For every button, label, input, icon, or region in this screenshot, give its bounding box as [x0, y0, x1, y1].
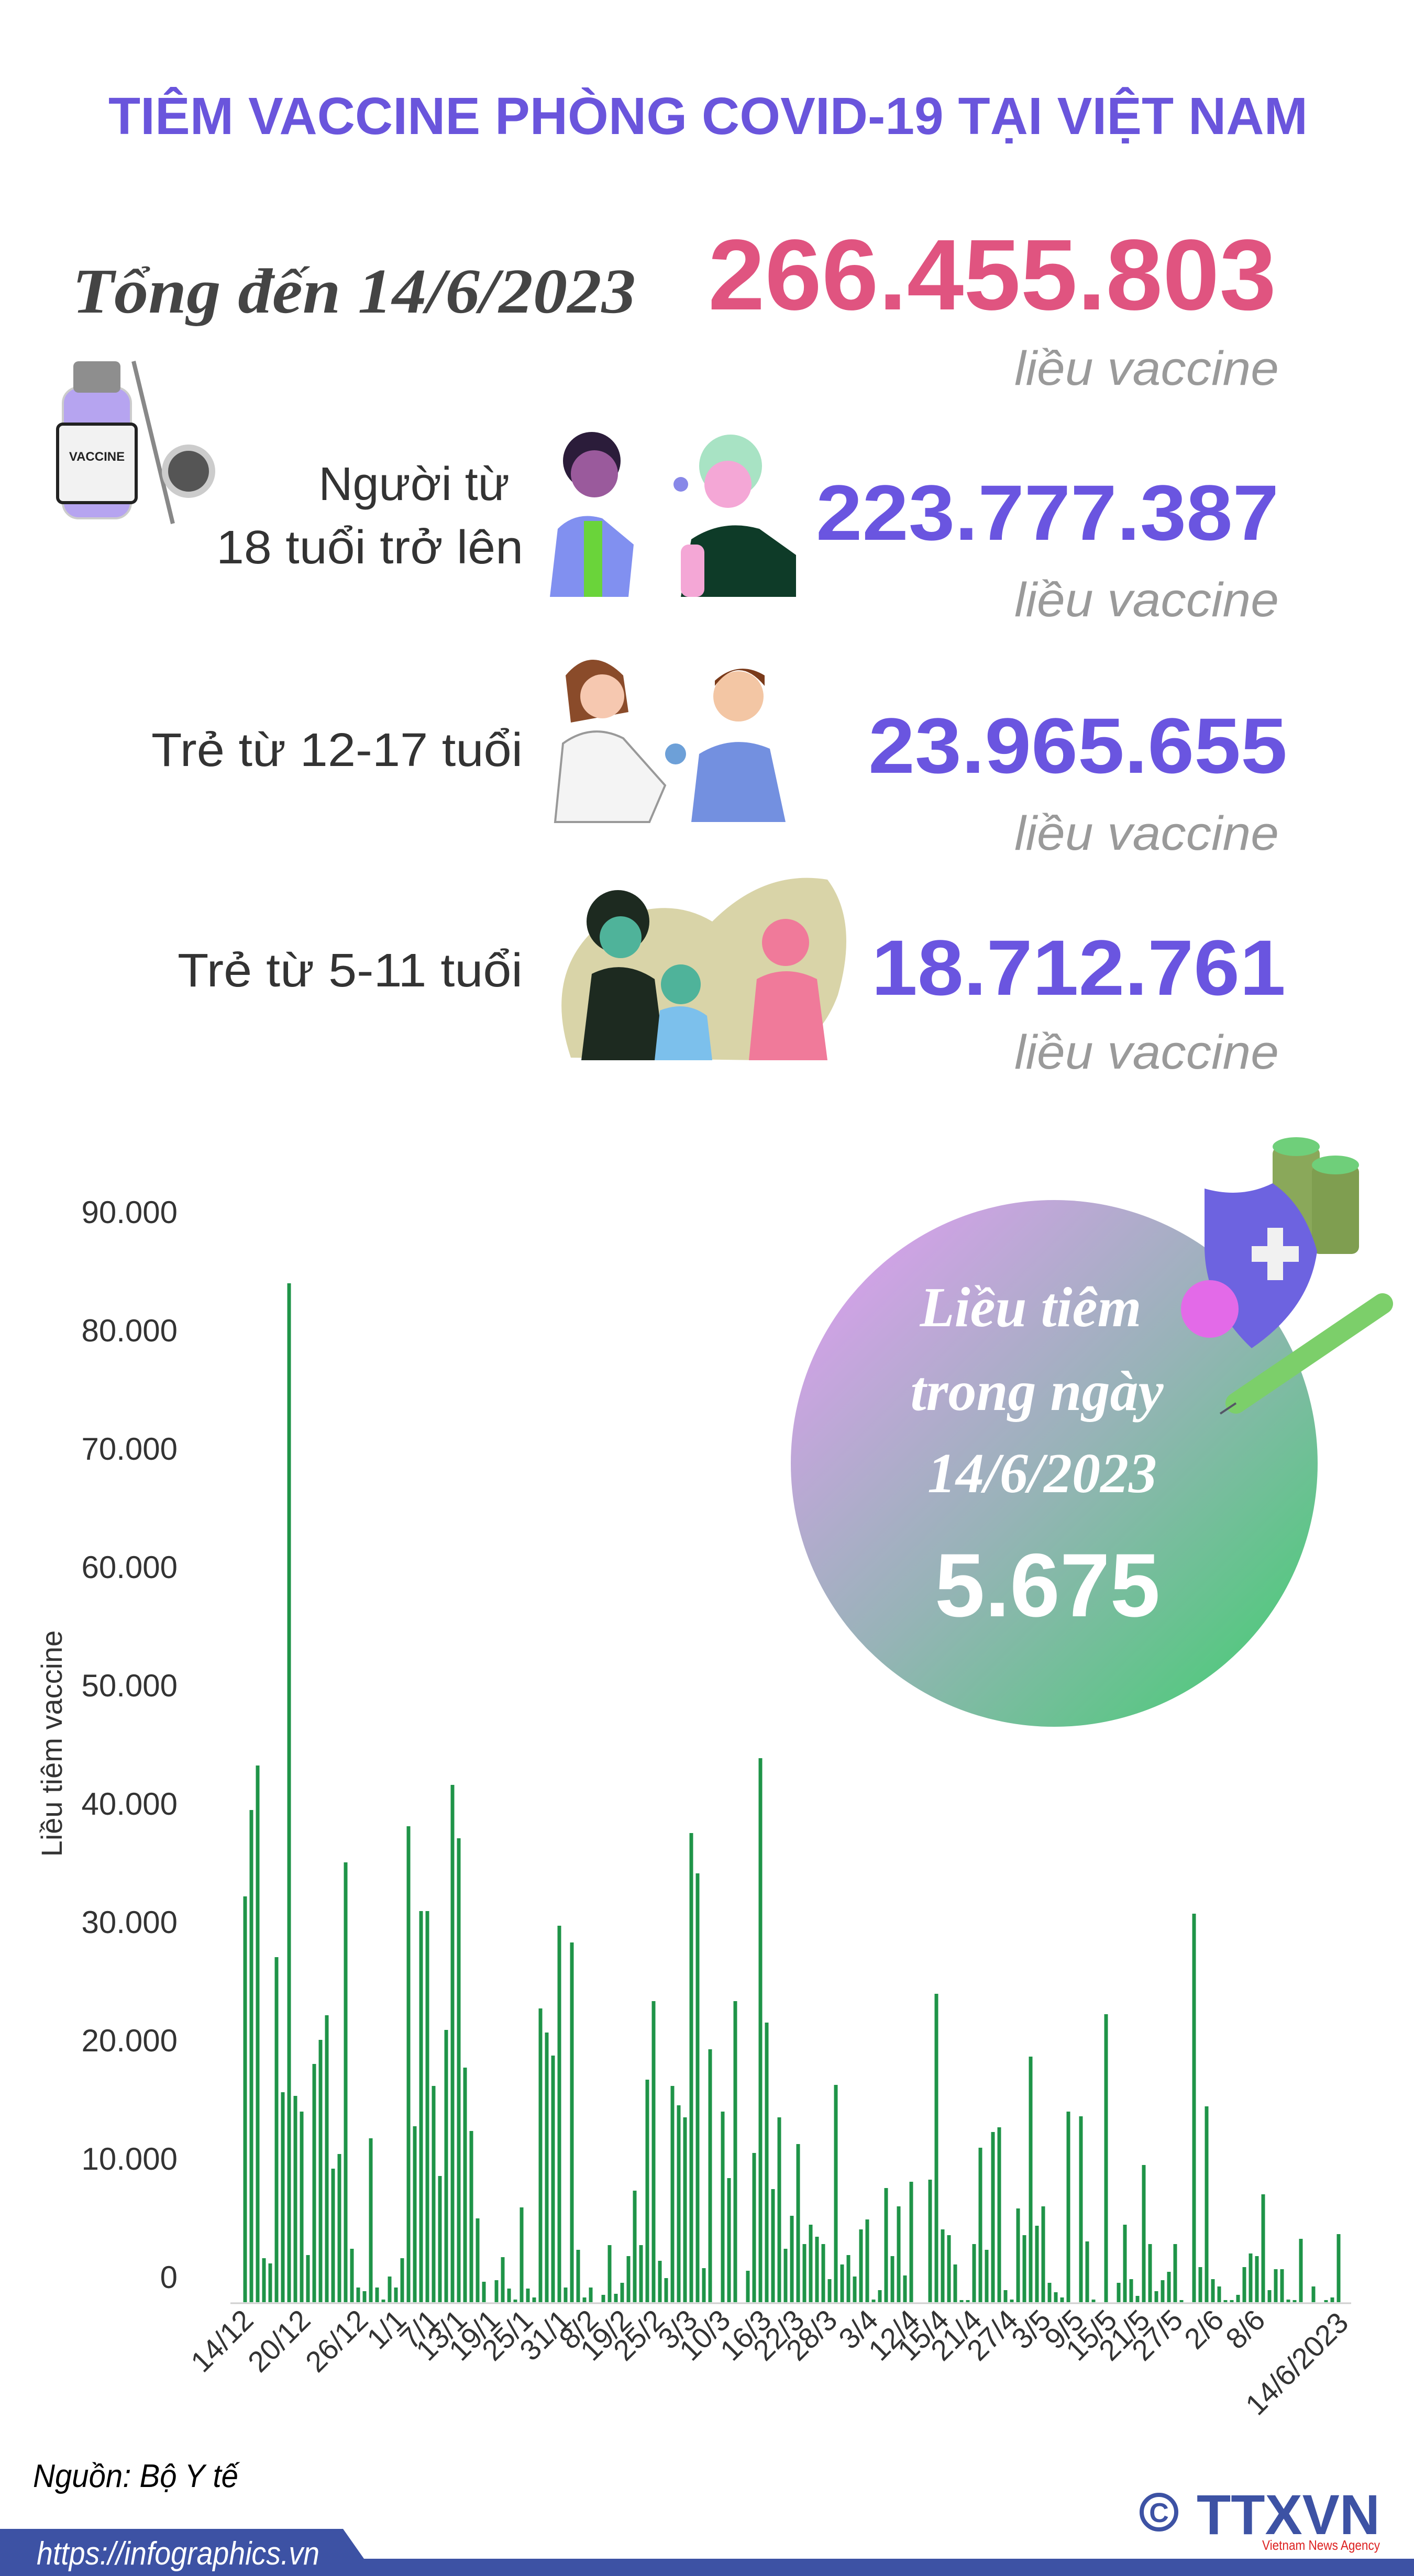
- bar chart: [230, 1283, 1351, 2303]
- logo: TTXVN: Vietnam News Agency: [1262, 2537, 1380, 2553]
- title: TIÊM VACCINE PHÒNG COVID-19 TẠI VIỆT NAM: [108, 87, 1308, 146]
- logo: TTXVN: C: [1149, 2498, 1169, 2528]
- y axis labels: 80.000: [81, 1313, 178, 1348]
- x axis date labels: 13/1: [410, 2303, 473, 2367]
- total unit: liều vaccine: [1014, 342, 1279, 395]
- x axis date labels: 3/3: [651, 2303, 703, 2356]
- x axis date labels: 14/12: [184, 2303, 259, 2379]
- y axis labels: 0: [160, 2260, 178, 2295]
- number: 5-11: 18.712.761: [871, 924, 1286, 1012]
- x axis date labels: 16/3: [714, 2303, 777, 2367]
- logo: TTXVN: [1142, 2483, 1380, 2553]
- y axis labels: 30.000: [81, 1905, 178, 1940]
- x axis date labels: 26/12: [299, 2303, 374, 2379]
- y axis labels: 60.000: [81, 1550, 178, 1585]
- x axis date labels: 12/4: [862, 2303, 925, 2367]
- label: 12-17: Trẻ từ 12-17 tuổi: [151, 724, 523, 776]
- illustration: mother child doctor: [561, 878, 846, 1060]
- x axis date labels: 21/5: [1092, 2303, 1156, 2367]
- x axis date labels: 3/4: [832, 2303, 884, 2356]
- source note: Nguồn: Bộ Y tế: [33, 2458, 240, 2494]
- label: adults: Người từ: [318, 458, 510, 510]
- y axis labels: 10.000: [81, 2141, 178, 2177]
- unit: 5-11: liều vaccine: [1014, 1026, 1279, 1079]
- callout circle: daily doses: 14/6/2023: [927, 1442, 1157, 1505]
- y axis labels: 90.000: [81, 1195, 178, 1230]
- callout circle: daily doses: Liều tiêm: [920, 1276, 1141, 1339]
- icon: shield, vials, syringe, virus: [1181, 1137, 1383, 1414]
- x axis date labels: 15/5: [1059, 2303, 1123, 2367]
- footer band with URL: https://infographics.vn: [37, 2536, 319, 2572]
- total number: 266.455.803: [708, 218, 1276, 331]
- x axis date labels: 21/4: [924, 2303, 988, 2367]
- x axis date labels: 31/1: [513, 2303, 577, 2367]
- callout circle: daily doses: trong ngày: [910, 1360, 1164, 1423]
- unit: adults: liều vaccine: [1014, 573, 1279, 627]
- label: adults: [216, 458, 523, 574]
- x axis date labels: 25/2: [607, 2303, 670, 2367]
- x axis date labels: 22/3: [747, 2303, 810, 2367]
- x axis date labels: 8/6: [1219, 2303, 1271, 2356]
- x axis date labels: 7/1: [393, 2303, 445, 2356]
- logo: TTXVN: TTXVN: [1197, 2483, 1380, 2546]
- x axis date labels: 15/4: [891, 2303, 955, 2367]
- label: adults: 18 tuổi trở lên: [216, 521, 523, 574]
- y axis title: Liều tiêm vaccine: [35, 1630, 68, 1857]
- unit: 12-17: liều vaccine: [1014, 807, 1279, 860]
- x axis date labels: 14/6/2023: [1239, 2306, 1354, 2422]
- x axis date labels: 10/3: [673, 2303, 736, 2367]
- x axis date labels: 3/5: [1005, 2303, 1057, 2356]
- x axis date labels: 25/1: [476, 2303, 539, 2367]
- callout circle: daily doses: [791, 1200, 1318, 1727]
- x axis date labels: 19/2: [574, 2303, 637, 2367]
- x axis date labels: 20/12: [241, 2303, 316, 2379]
- y axis labels: [81, 1195, 178, 2295]
- total label: Tổng đến 14/6/2023: [72, 256, 636, 327]
- x axis date labels: 2/6: [1178, 2303, 1230, 2356]
- y axis labels: 20.000: [81, 2023, 178, 2058]
- label: 5-11: Trẻ từ 5-11 tuổi: [178, 945, 523, 997]
- x axis date labels: [184, 2303, 1354, 2422]
- x axis date labels: 9/5: [1038, 2303, 1090, 2356]
- icon: vaccine vial: VACCINE: [69, 450, 125, 464]
- x axis date labels: 27/5: [1125, 2303, 1189, 2367]
- x axis date labels: 27/4: [960, 2303, 1024, 2367]
- callout circle: daily doses: 5.675: [935, 1535, 1160, 1636]
- number: 12-17: 23.965.655: [868, 702, 1287, 790]
- y axis labels: 70.000: [81, 1431, 178, 1467]
- illustration: nurse and teen: [555, 660, 786, 822]
- x axis date labels: 1/1: [360, 2303, 412, 2356]
- x axis date labels: 8/2: [553, 2303, 604, 2356]
- number: adults: 223.777.387: [816, 469, 1279, 557]
- y axis labels: 40.000: [81, 1786, 178, 1822]
- y axis labels: 50.000: [81, 1668, 178, 1703]
- x axis date labels: 19/1: [443, 2303, 506, 2367]
- footer band with URL: [0, 2529, 1414, 2576]
- x axis date labels: 28/3: [780, 2303, 843, 2367]
- illustration: doctor and elder: [550, 432, 796, 597]
- icon: vaccine vial: [58, 361, 212, 524]
